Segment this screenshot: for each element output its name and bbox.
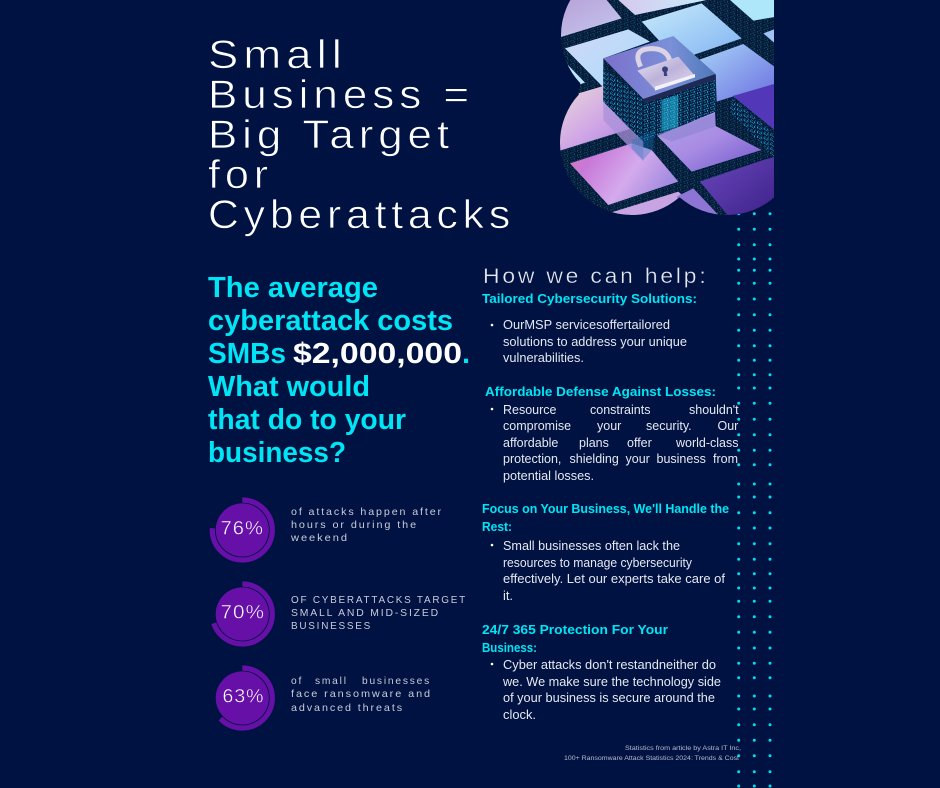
stat: 63%: of xyxy=(291,676,303,687)
headline question: What would xyxy=(208,371,370,403)
section: affordable defense: plans xyxy=(579,436,609,450)
stat: 76%: of attacks happen after xyxy=(291,507,443,518)
section: affordable defense: shouldn't xyxy=(689,403,739,417)
source note xyxy=(564,745,741,762)
section: affordable defense: your xyxy=(597,419,621,433)
icon: padlock xyxy=(637,49,695,91)
stat: 70%: OF CYBERATTACKS TARGET xyxy=(291,595,467,606)
stat: 70%: 70% xyxy=(220,602,265,624)
section: affordable defense: from xyxy=(713,452,738,466)
section: focus on your business: effectively. Let our experts take care of xyxy=(503,572,726,586)
stat: 70%: BUSINESSES xyxy=(291,621,372,632)
stat: 76%: weekend xyxy=(290,533,349,544)
section: tailored solutions xyxy=(482,291,697,365)
title: Small xyxy=(208,33,347,77)
section: focus on your business: it. xyxy=(503,589,513,603)
stat: 63%: small xyxy=(315,676,348,687)
stat: 70%: SMALL AND MID-SIZED xyxy=(291,608,440,619)
title: for xyxy=(208,153,273,197)
section: 24/7 protection xyxy=(482,622,721,722)
section: affordable defense: business xyxy=(656,452,706,466)
headline question: that do to your xyxy=(208,404,406,436)
headline question: $2,000,000 xyxy=(293,338,462,370)
section: 24/7 protection: 24/7 365 Protection For Your xyxy=(482,622,668,637)
section: affordable defense xyxy=(485,384,739,483)
title: Cyberattacks xyxy=(208,193,515,237)
section: affordable defense: Our xyxy=(718,419,738,433)
headline question: cyberattack costs xyxy=(208,305,453,337)
section: 24/7 protection: Cyber attacks don't restandneither do xyxy=(503,658,716,672)
section: 24/7 protection: Business: xyxy=(482,640,537,655)
headline question: The average xyxy=(208,272,378,304)
section: affordable defense: affordable xyxy=(503,436,558,450)
section: affordable defense: your xyxy=(626,452,650,466)
stat: 70% xyxy=(212,584,467,644)
section: focus on your business: Small businesses often lack the xyxy=(503,539,680,553)
section: tailored solutions: OurMSP servicesoffertailored xyxy=(503,318,670,332)
section: 24/7 protection: we. We make sure the technology side xyxy=(502,675,721,689)
section: affordable defense: protection, xyxy=(503,452,561,466)
section: focus on your business xyxy=(482,501,729,603)
section: affordable defense: offer xyxy=(627,436,652,450)
section: 24/7 protection: clock. xyxy=(503,708,536,722)
stat: 63% xyxy=(212,668,432,728)
section: focus on your business: Focus on Your Business, We'll Handle the xyxy=(482,501,729,516)
headline question xyxy=(208,272,470,469)
stat: 63%: businesses xyxy=(362,676,431,687)
section: affordable defense: security. xyxy=(646,419,692,433)
stat: 76% xyxy=(212,500,443,560)
headline question: business? xyxy=(208,437,346,469)
source note: Statistics from article by Astra IT Inc, xyxy=(625,745,741,752)
section: affordable defense: Affordable Defense Against Losses: xyxy=(485,384,716,399)
section: tailored solutions: Tailored Cybersecurity Solutions: xyxy=(482,291,697,306)
stat: 63%: 63% xyxy=(222,686,264,708)
section: focus on your business: Rest: xyxy=(482,519,512,534)
headline question: SMBs xyxy=(208,338,286,370)
section: tailored solutions: solutions to address your unique xyxy=(503,335,687,349)
title xyxy=(208,33,515,237)
section: affordable defense: world-class xyxy=(675,436,739,450)
dotted column pattern xyxy=(739,214,770,786)
section: tailored solutions: vulnerabilities. xyxy=(503,351,584,365)
stat: 63%: advanced threats xyxy=(291,703,404,714)
section: affordable defense: shielding xyxy=(570,452,619,466)
source note: 100+ Ransomware Attack Statistics 2024: Trends & Cost xyxy=(564,755,739,762)
image: padlock on glowing data tiles xyxy=(550,0,777,220)
section: focus on your business: resources to manage cybersecurity xyxy=(503,556,693,570)
stat: 76%: hours or during the xyxy=(291,520,418,531)
title: Business = xyxy=(208,73,474,117)
stat: 76%: 76% xyxy=(220,518,264,540)
section: affordable defense: compromise xyxy=(503,419,571,433)
stat: 63%: face ransomware and xyxy=(291,689,432,700)
headline question: . xyxy=(462,338,470,370)
section: affordable defense: Resource xyxy=(503,403,557,417)
section: affordable defense: potential losses. xyxy=(503,469,594,483)
heading: how we can help: How we can help: xyxy=(483,265,708,288)
section: affordable defense: constraints xyxy=(590,403,650,417)
title: Big Target xyxy=(208,113,454,157)
section: 24/7 protection: of your business is secure around the xyxy=(503,691,715,705)
